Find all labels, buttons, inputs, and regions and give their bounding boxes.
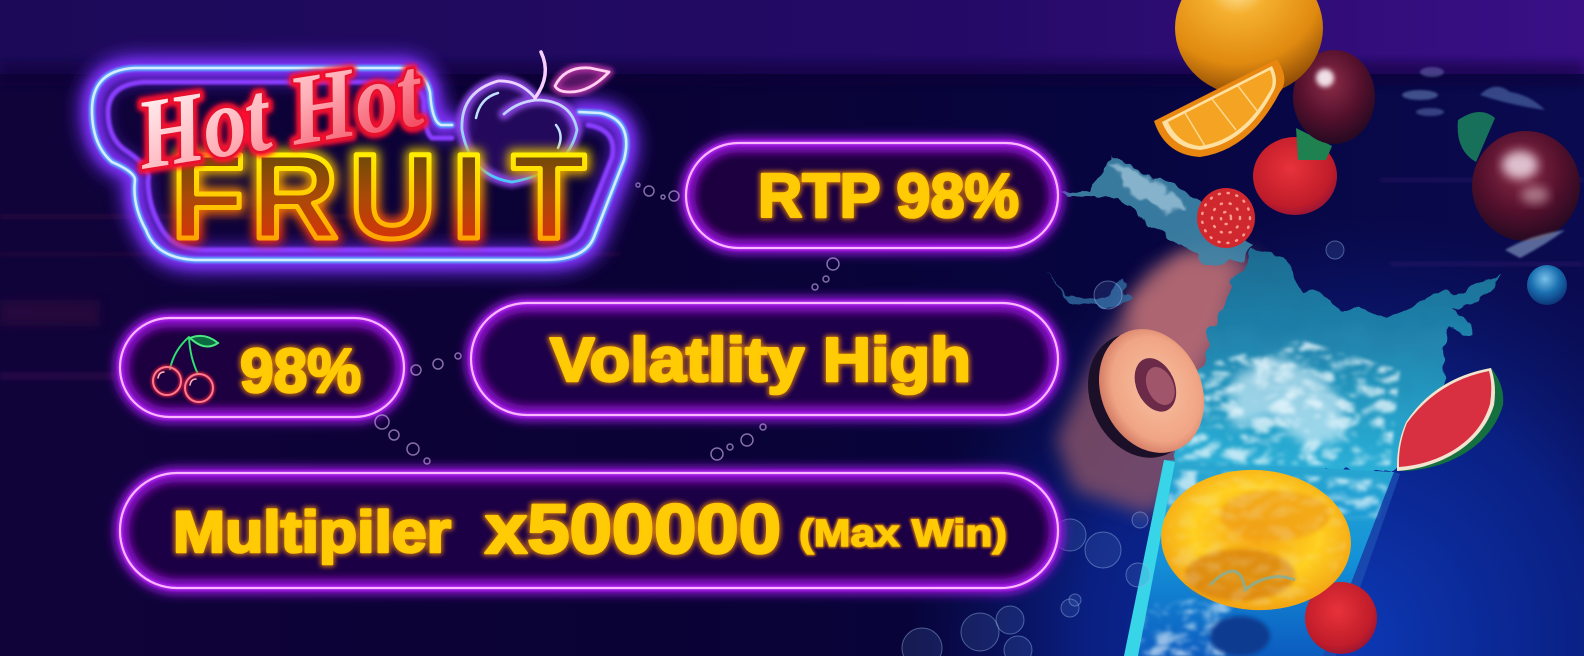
volatility text: Volatlity High	[550, 326, 971, 395]
logo word: Hot Hot: Hot Hot	[128, 36, 431, 191]
logo word: FRUIT: FRUIT	[171, 128, 586, 264]
icon: neon plum	[462, 52, 609, 182]
logo word: Hot Hot: Hot Hot	[128, 36, 431, 191]
drinking glass with fruit splash	[902, 0, 1580, 656]
panel: RTP pill	[686, 143, 1058, 248]
peach half	[1069, 312, 1223, 475]
left water splash	[1040, 152, 1258, 312]
strawberry	[1253, 128, 1337, 215]
multiplier text: x500000	[485, 490, 781, 568]
panel: volatility pill	[471, 303, 1058, 415]
multiplier text: (Max Win)	[799, 513, 1007, 555]
right plum with leaf	[1458, 112, 1580, 241]
glass body	[1124, 460, 1394, 656]
cherry pill value: 98%	[240, 337, 361, 406]
blue berry	[1527, 265, 1567, 305]
multiplier text: Multipiler	[173, 500, 451, 565]
panel: cherry pill	[120, 318, 404, 417]
neon frame	[92, 68, 626, 260]
glass edges	[1124, 460, 1400, 656]
RTP value: RTP 98%	[758, 162, 1019, 231]
RTP value: RTP 98%	[758, 162, 1019, 231]
multiplier text: x500000	[485, 490, 781, 568]
orange wedge	[1154, 59, 1284, 157]
cherry pill value: 98%	[240, 337, 361, 406]
bottom strawberry	[1305, 582, 1377, 654]
main water splash	[1170, 247, 1500, 470]
icon: neon cherries	[153, 336, 218, 402]
raspberry	[1197, 188, 1255, 248]
whole orange	[1175, 0, 1323, 96]
multiplier text: (Max Win)	[799, 513, 1007, 555]
multiplier text	[173, 490, 1007, 568]
multiplier text: Multipiler	[173, 500, 451, 565]
watermelon wedge	[1397, 368, 1503, 471]
plum	[1293, 50, 1375, 144]
panel: multiplier pill	[120, 473, 1058, 588]
logo: Hot Hot Fruit neon sign	[92, 36, 626, 264]
volatility text: Volatlity High	[550, 326, 971, 395]
water foam	[1130, 340, 1400, 656]
logo word: FRUIT: FRUIT	[171, 128, 586, 264]
bubbles	[902, 241, 1344, 656]
right water wisps	[1402, 67, 1565, 258]
lemon slice	[1156, 464, 1356, 616]
decorative connector bubbles	[375, 183, 839, 464]
blurred peach backdrop	[1056, 238, 1262, 515]
